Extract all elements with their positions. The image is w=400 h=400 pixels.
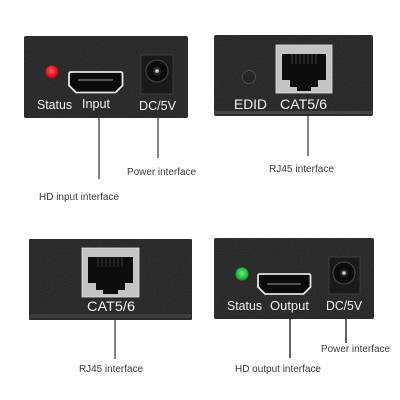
panel body bbox=[214, 238, 374, 319]
text: Power interface: Power interface bbox=[321, 344, 390, 355]
arrow: HD input leader line bbox=[98, 118, 100, 179]
icon: DC power jack bbox=[141, 55, 173, 94]
panel: output unit rear bbox=[29, 239, 192, 320]
panel: input unit front bbox=[24, 36, 188, 118]
label: DC/5V: DC/5V bbox=[326, 299, 363, 313]
arrow: power leader line bbox=[345, 319, 347, 343]
icon: EDID button bbox=[242, 70, 256, 84]
text: Power interface: Power interface bbox=[127, 167, 196, 178]
icon: green status LED bbox=[236, 268, 248, 280]
panel body bbox=[24, 36, 188, 118]
icon: RJ45 port bbox=[82, 248, 139, 297]
icon: red status LED bbox=[46, 66, 58, 78]
label: DC/5V: DC/5V bbox=[139, 99, 177, 113]
panel: input unit rear bbox=[214, 35, 373, 116]
arrow: RJ45 leader line bbox=[307, 116, 309, 156]
label: EDID: EDID bbox=[234, 97, 267, 112]
panel: output unit front bbox=[214, 238, 374, 319]
arrow: RJ45 leader line bbox=[114, 320, 116, 359]
icon: RJ45 port bbox=[276, 45, 332, 93]
text: HD output interface: HD output interface bbox=[235, 364, 321, 375]
label: Status: Status bbox=[227, 299, 262, 313]
text: RJ45 interface: RJ45 interface bbox=[269, 164, 334, 175]
arrow: power leader line bbox=[157, 118, 159, 158]
text: RJ45 interface: RJ45 interface bbox=[79, 364, 143, 375]
label: Input: Input bbox=[82, 97, 111, 111]
label: Status: Status bbox=[37, 98, 72, 112]
label: Output: Output bbox=[270, 299, 310, 313]
icon: HDMI output port bbox=[258, 274, 310, 294]
arrow: HD output leader line bbox=[289, 319, 291, 358]
label: CAT5/6: CAT5/6 bbox=[87, 299, 135, 314]
label: CAT5/6: CAT5/6 bbox=[280, 97, 327, 112]
icon: DC power jack bbox=[329, 257, 360, 294]
text: HD input interface: HD input interface bbox=[39, 192, 119, 203]
panel body bbox=[214, 35, 373, 116]
icon: HDMI input port bbox=[69, 72, 122, 92]
panel body bbox=[29, 239, 192, 320]
